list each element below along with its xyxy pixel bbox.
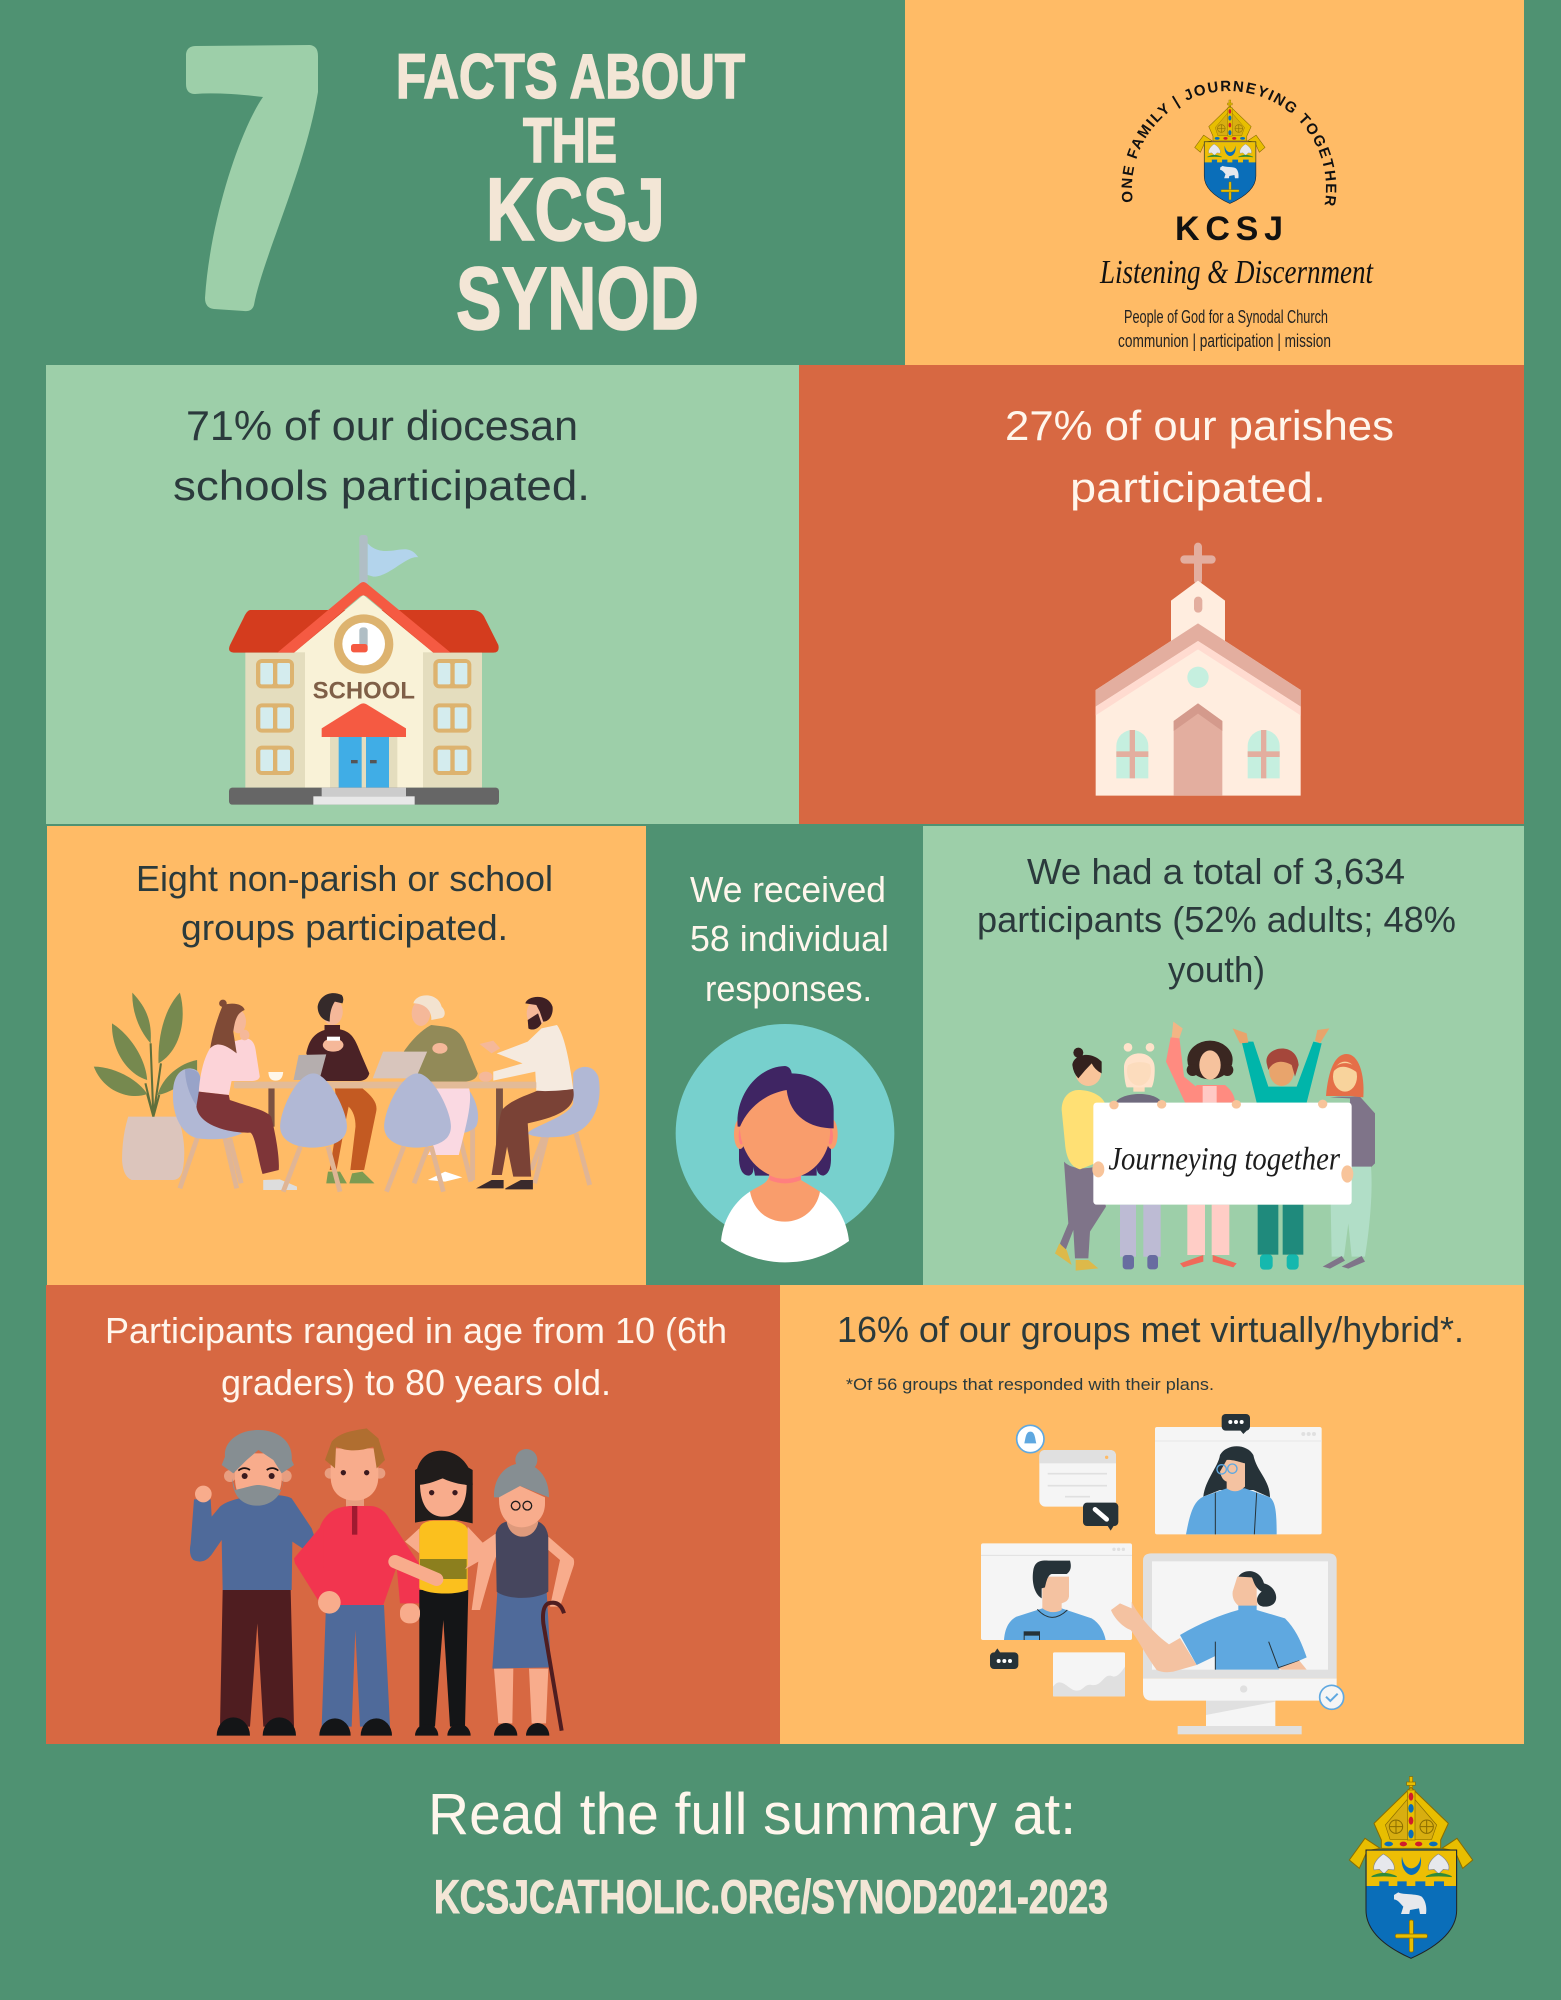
panel: individual responses bbox=[646, 826, 923, 1285]
icon: group holding sign: Journeying together bbox=[1108, 1141, 1340, 1177]
fact text: 58 individual bbox=[690, 918, 889, 959]
fact text: 71% of our diocesan bbox=[186, 402, 578, 449]
heading lines bbox=[396, 42, 745, 348]
fact text bbox=[173, 402, 590, 509]
logo tagline: communion | participation | mission bbox=[1118, 331, 1331, 351]
icon: person avatar bbox=[676, 1024, 894, 1262]
logo tagline bbox=[1118, 307, 1331, 351]
panel: total participants bbox=[923, 826, 1524, 1285]
script line: Listening & Discernment bbox=[1099, 254, 1374, 291]
fact text bbox=[1005, 402, 1394, 511]
icon: four people of different ages bbox=[190, 1428, 574, 1736]
fact text bbox=[977, 851, 1456, 990]
fact text: responses. bbox=[705, 968, 872, 1009]
fact text: 16% of our groups met virtually/hybrid*. bbox=[837, 1309, 1464, 1350]
heading lines: SYNOD bbox=[456, 248, 699, 348]
icon: diocesan crest bbox=[1349, 1777, 1473, 1958]
heading lines: KCSJ bbox=[486, 159, 665, 259]
icon: school bbox=[229, 535, 499, 805]
fact text bbox=[136, 858, 553, 948]
fact text: We had a total of 3,634 bbox=[1027, 851, 1405, 892]
panel: diocesan logo bbox=[905, 0, 1524, 365]
arc slogan: ONE FAMILY | JOURNEYING TOGETHER bbox=[1122, 80, 1336, 206]
icon: video call windows bbox=[981, 1414, 1344, 1734]
title block bbox=[186, 42, 745, 348]
fact text: youth) bbox=[1168, 949, 1265, 990]
fact text: graders) to 80 years old. bbox=[221, 1362, 611, 1403]
footnote: *Of 56 groups that responded with their plans. bbox=[846, 1375, 1214, 1394]
footer line: Read the full summary at: bbox=[428, 1782, 1076, 1847]
icon: school: SCHOOL bbox=[313, 677, 415, 704]
fact text: groups participated. bbox=[181, 907, 508, 948]
fact text: participated. bbox=[1070, 464, 1326, 511]
fact text: Eight non-parish or school bbox=[136, 858, 553, 899]
panel: schools bbox=[46, 365, 799, 824]
fact text: Participants ranged in age from 10 (6th bbox=[105, 1310, 727, 1351]
icon: crest small bbox=[1195, 100, 1265, 204]
fact text: schools participated. bbox=[173, 462, 590, 509]
fact text: We received bbox=[690, 869, 886, 910]
footer link: KCSJCATHOLIC.ORG/SYNOD2021-2023 bbox=[434, 1870, 1108, 1923]
fact text bbox=[690, 869, 889, 1009]
logo tagline: People of God for a Synodal Church bbox=[1124, 307, 1328, 327]
panel: non-parish groups bbox=[47, 826, 646, 1285]
panel: parishes bbox=[799, 365, 1524, 824]
icon: meeting around a table bbox=[94, 993, 600, 1192]
panel: age range bbox=[46, 1285, 780, 1744]
big numeral 7 bbox=[186, 45, 318, 311]
footer call to action bbox=[428, 1782, 1108, 1923]
fact text: 27% of our parishes bbox=[1005, 402, 1394, 449]
fact text: participants (52% adults; 48% bbox=[977, 899, 1456, 940]
logo lettering: KCSJ bbox=[1175, 210, 1283, 248]
heading lines: THE bbox=[523, 106, 617, 176]
fact text bbox=[105, 1310, 727, 1403]
icon: church bbox=[1096, 543, 1301, 796]
icon: group holding sign bbox=[1055, 1022, 1375, 1271]
panel: virtual meetings bbox=[780, 1285, 1524, 1744]
heading lines: FACTS ABOUT bbox=[396, 42, 745, 112]
